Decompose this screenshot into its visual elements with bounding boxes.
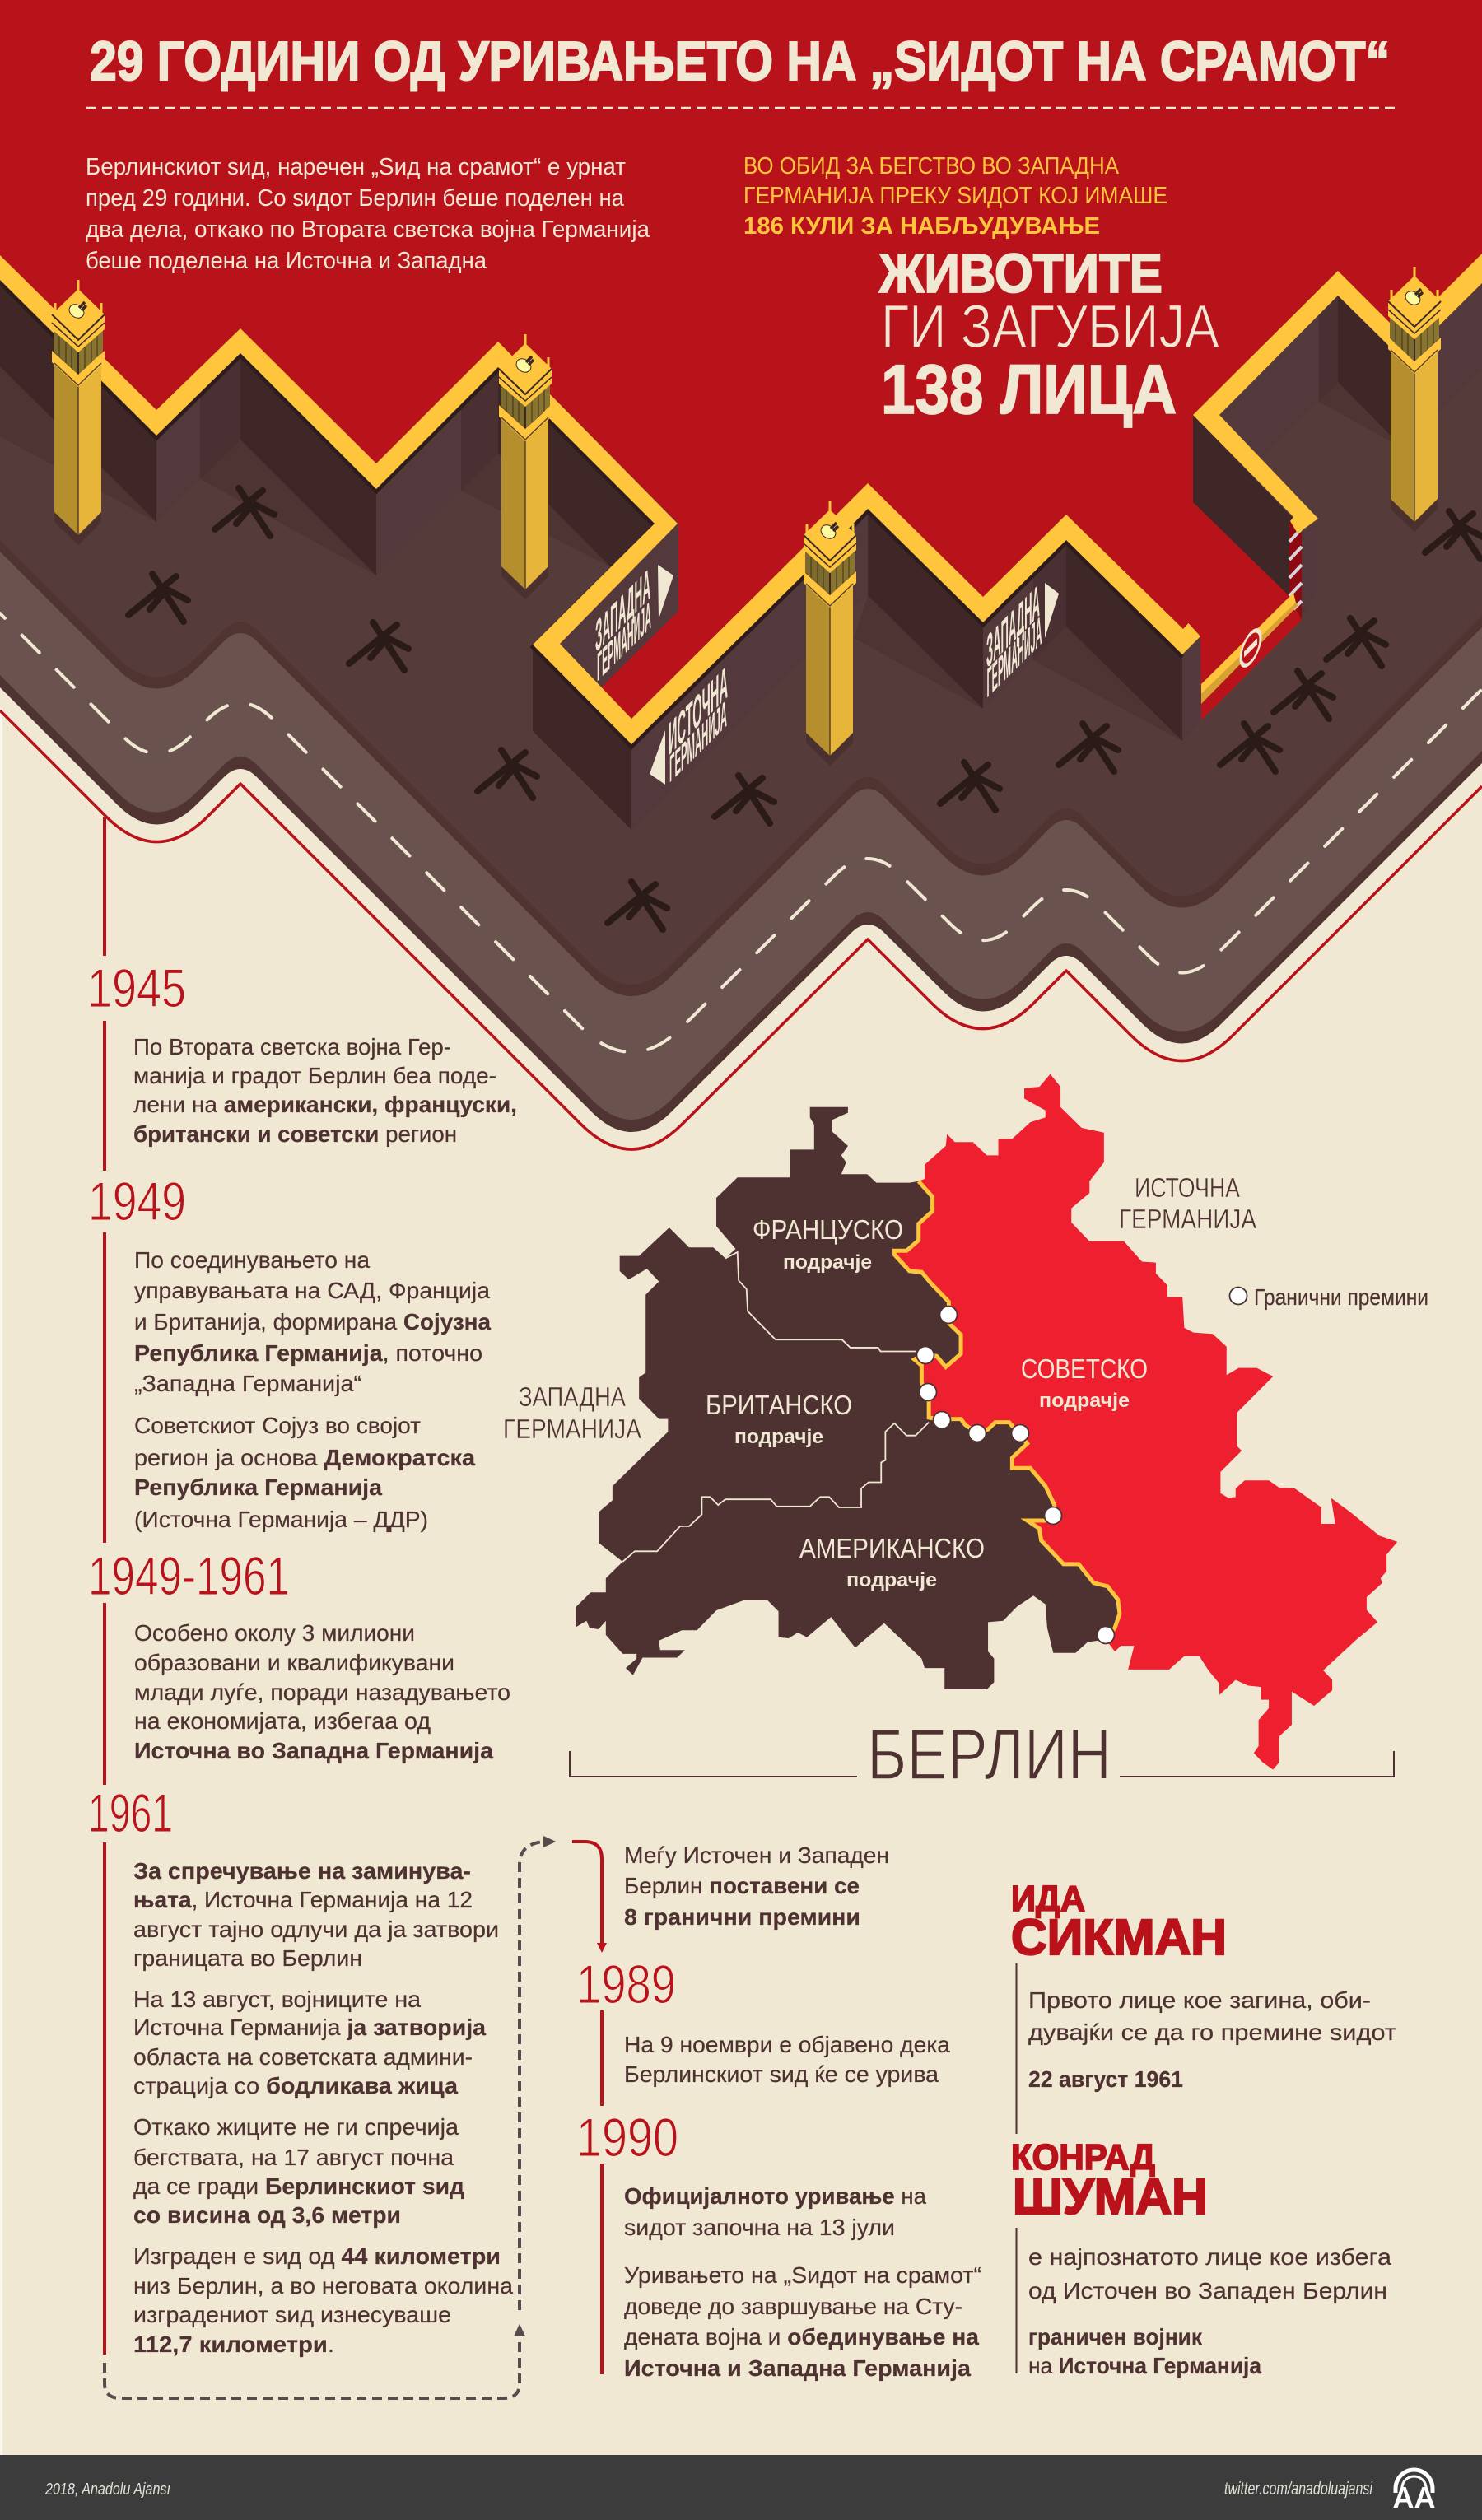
intro text: пред 29 години. Со ѕидот Берлин беше поделен на — [86, 185, 625, 212]
text block 1990: Официјалното уривање на — [624, 2183, 926, 2209]
text block 1949-1961: Особено околу 3 милиони — [134, 1620, 415, 1646]
text block 1949-1961: образовани и квалификувани — [134, 1650, 454, 1675]
ground strip — [0, 0, 1482, 985]
watchtower 3 — [804, 501, 856, 766]
escapee: Конрад Шуман: граничен војник — [1028, 2324, 1203, 2350]
text block 1949: „Западна Германија“ — [134, 1371, 361, 1396]
outer red line along the road — [0, 710, 1482, 1149]
text block 1961: Изграден е ѕид од 44 километри — [133, 2243, 501, 2269]
year 1989: 1989 — [576, 1954, 676, 2015]
wall faces — [0, 280, 1482, 830]
map label: East Germany: ГЕРМАНИЈА — [1119, 1204, 1256, 1234]
escapee: Конрад Шуман: од Источен во Западен Берлин — [1028, 2278, 1387, 2303]
text block 1949: По соединувањето на — [134, 1247, 370, 1273]
map label: American sector: АМЕРИКАНСКО — [799, 1533, 985, 1563]
year 1949: 1949 — [88, 1171, 186, 1232]
map caption: Берлин: БЕРЛИН — [867, 1715, 1112, 1795]
map label: French sector — [753, 1214, 903, 1274]
infographic canvas: ГЕРМАНИЈА — [597, 593, 651, 691]
yellow wall line — [894, 1181, 1120, 1640]
text block 1989 — [624, 2032, 950, 2087]
map label: East Germany — [1119, 1172, 1256, 1234]
text block 1961: да се гради Берлинскиот ѕид — [133, 2173, 464, 2199]
text block 1945 — [133, 1034, 517, 1147]
text block 1961: изградениот ѕид изнесуваше — [133, 2302, 451, 2327]
title divider — [86, 107, 1397, 109]
escapee: Конрад Шуман: е најпознатото лице кое избега — [1028, 2244, 1391, 2270]
text block 1990 — [624, 2183, 981, 2381]
year 1949-1961: 1949-1961 — [88, 1545, 290, 1606]
sign: Западна Германија, right — [986, 573, 1059, 707]
victim: Ида Сикман — [1011, 1879, 1396, 2134]
text block 1945: По Втората светска војна Гер- — [133, 1034, 451, 1060]
yellow wall top, right section — [1193, 254, 1482, 533]
infographic canvas: ИСТОЧНА — [669, 654, 728, 766]
anti-tank obstacles — [128, 488, 1482, 929]
text block 1949: и Британија, формирана Сојузна — [134, 1309, 491, 1335]
intro text: два дела, откако по Втората светска војна Германија — [86, 217, 650, 243]
escapee: Конрад Шуман — [1011, 2137, 1391, 2378]
text block 1949: управувањата на САД, Франција — [134, 1278, 490, 1303]
text block 1961 — [133, 1858, 513, 2357]
red territory — [0, 0, 1482, 720]
text block 1961: границата во Берлин — [133, 1945, 362, 1971]
watchtowers fact — [743, 153, 1167, 240]
infographic canvas: ЗАПАДНА — [595, 558, 650, 663]
wall shadows on the ground — [0, 366, 1404, 741]
left page edge — [0, 708, 2, 2455]
text block 1990: Уривањето на „Ѕидот на срамот“ — [624, 2262, 981, 2288]
timeline rail — [103, 817, 106, 2355]
footer bar: twitter.com/anadoluajansi — [1224, 2478, 1373, 2499]
text block 1961: со висина од 3,6 метри — [133, 2202, 401, 2228]
yellow wall top, main section — [0, 255, 1200, 744]
border crossing markers — [917, 1306, 1115, 1643]
text block 1949-1961: на економијата, избегаа од — [134, 1708, 431, 1734]
text block 1949: Република Германија — [134, 1474, 382, 1500]
text block 1949-1961: млади луѓе, поради назадувањето — [134, 1679, 510, 1705]
watchtowers fact: ГЕРМАНИЈА ПРЕКУ ЅИДОТ КОЈ ИМАШЕ — [743, 183, 1167, 209]
map label: French sector: ФРАНЦУСКО — [753, 1214, 903, 1245]
year 1945: 1945 — [87, 957, 186, 1018]
text block 1990: ѕидот започна на 13 јули — [624, 2215, 895, 2240]
text block 1961: Источна Германија ја затворија — [133, 2015, 486, 2040]
road with edges and centre markings — [0, 0, 1482, 1132]
middle rail — [600, 2010, 604, 2374]
text block 1990: Источна и Западна Германија — [624, 2355, 971, 2381]
sign: Источна Германија — [650, 654, 728, 791]
text block 1990: доведе до завршување на Сту- — [624, 2294, 962, 2319]
map label: American sector — [799, 1533, 985, 1591]
sign: Западна Германија, upper — [595, 558, 673, 691]
map label: West Germany: ГЕРМАНИЈА — [503, 1414, 641, 1444]
border gate bar — [1201, 593, 1298, 704]
text: border crossings: Меѓу Источен и Западен — [624, 1842, 889, 1868]
escapee: Конрад Шуман: на Источна Германија — [1028, 2353, 1261, 2378]
text block 1945: лени на американски, француски, — [133, 1092, 517, 1117]
infographic canvas: ГЕРМАНИЈА — [669, 691, 727, 791]
text block 1961: 112,7 километри . — [133, 2331, 334, 2357]
text block 1949: Република Германија, поточно — [134, 1340, 482, 1366]
deaths callout — [878, 243, 1220, 428]
intro text — [86, 154, 650, 274]
map label: British sector: БРИТАНСКО — [706, 1390, 852, 1420]
victim: Ида Сикман: ИДА — [1011, 1879, 1085, 1919]
Soviet sector — [894, 1074, 1397, 1770]
watchtowers fact: ВО ОБИД ЗА БЕГСТВО ВО ЗАПАДНА — [743, 153, 1120, 179]
escapee: Конрад Шуман: КОНРАД — [1011, 2137, 1155, 2178]
text block 1949: Советскиот Сојуз во својот — [134, 1413, 421, 1438]
footer bar: 2018, Anadolu Ajansı — [44, 2480, 170, 2499]
text block 1949-1961: Источна во Западна Германија — [134, 1738, 493, 1763]
victim: Ида Сикман: 22 август 1961 — [1028, 2066, 1183, 2092]
intro text: Берлинскиот ѕид, наречен „Ѕид на срамот“ е урнат — [86, 154, 626, 180]
victim: Ида Сикман: СИКМАН — [1011, 1909, 1227, 1965]
infographic canvas: ГЕРМАНИЈА — [986, 606, 1042, 707]
map label: East Germany: ИСТОЧНА — [1135, 1172, 1240, 1203]
text block 1949: регион ја основа Демократска — [134, 1445, 475, 1470]
text: border crossings: Берлин поставени се — [624, 1873, 860, 1898]
text block 1989: На 9 ноември е објавено дека — [624, 2032, 950, 2057]
text: border crossings: 8 гранични премини — [624, 1904, 860, 1930]
red connector arrow — [572, 1842, 607, 1953]
victim: Ида Сикман: дувајќи се да го премине ѕидот — [1028, 2019, 1396, 2045]
deaths callout: ГИ ЗАГУБИЈА — [881, 292, 1220, 361]
wall shadow line — [0, 282, 1182, 747]
inner wall faces — [557, 415, 1293, 687]
text block 1961: Откако жиците не ги спречија — [133, 2114, 459, 2140]
watchtower 2 — [499, 334, 552, 599]
map label: West Germany — [503, 1381, 641, 1444]
deaths callout: ЖИВОТИТЕ — [878, 243, 1163, 305]
map legend: Гранични премини — [1254, 1284, 1428, 1310]
map of Berlin — [576, 1074, 1397, 1770]
text block 1961: областа на советската админи- — [133, 2044, 473, 2070]
text block 1961: њата, Источна Германија на 12 — [133, 1887, 473, 1912]
text block 1990: дената војна и обединување на — [624, 2324, 979, 2350]
text block 1949 — [134, 1247, 491, 1532]
escapee: Конрад Шуман: ШУМАН — [1013, 2168, 1208, 2224]
watchtower 4 — [1388, 267, 1441, 532]
map label: British sector: подрачје — [734, 1426, 823, 1448]
sector boundaries — [622, 1252, 929, 1562]
text block 1945: британски и советски регион — [133, 1121, 457, 1147]
year 1990: 1990 — [576, 2107, 678, 2168]
map label: Soviet sector: СОВЕТСКО — [1021, 1353, 1148, 1384]
no entry sign — [1241, 623, 1261, 673]
text block 1949-1961 — [134, 1620, 510, 1763]
text block 1961: На 13 август, војниците на — [133, 1987, 421, 2012]
text: border crossings — [624, 1842, 889, 1930]
text block 1961: За спречување на заминува- — [133, 1858, 471, 1884]
text block 1945: манија и градот Берлин беа поде- — [133, 1063, 496, 1088]
victim: Ида Сикман: Првото лице кое загина, оби- — [1028, 1987, 1371, 2013]
watchtower 1 — [52, 280, 105, 545]
deaths callout: 138 ЛИЦА — [881, 351, 1177, 428]
map label: Soviet sector — [1021, 1353, 1148, 1412]
icon: Anadolu Agency logo: AA — [1393, 2480, 1436, 2514]
year 1961: 1961 — [88, 1782, 173, 1843]
map caption: Берлин — [570, 1715, 1394, 1795]
map label: Soviet sector: подрачје — [1039, 1390, 1130, 1412]
watchtowers fact: 186 КУЛИ ЗА НАБЉУДУВАЊЕ — [743, 213, 1100, 240]
map label: British sector — [706, 1390, 852, 1448]
text block 1961: низ Берлин, а во неговата околина — [133, 2273, 513, 2299]
map label: American sector: подрачје — [846, 1569, 937, 1591]
text block 1949: (Источна Германија – ДДР) — [134, 1507, 428, 1532]
infographic canvas: ЗАПАДНА — [986, 573, 1040, 678]
map label: West Germany: ЗАПАДНА — [519, 1381, 626, 1412]
text block 1961: бегствата, на 17 август почна — [133, 2145, 454, 2170]
text block 1961: страција со бодликава жица — [133, 2073, 458, 2098]
striped barrier post — [1289, 521, 1302, 620]
text block 1989: Берлинскиот ѕид ќе се урива — [624, 2061, 939, 2087]
dashed connector arrow — [105, 1837, 554, 2398]
text block 1961: август тајно одлучи да ја затвори — [133, 1917, 499, 1942]
footer bar — [0, 2455, 1482, 2520]
western sectors — [576, 1107, 1120, 1689]
map label: French sector: подрачје — [783, 1251, 872, 1274]
intro text: беше поделена на Источна и Западна — [86, 248, 487, 274]
